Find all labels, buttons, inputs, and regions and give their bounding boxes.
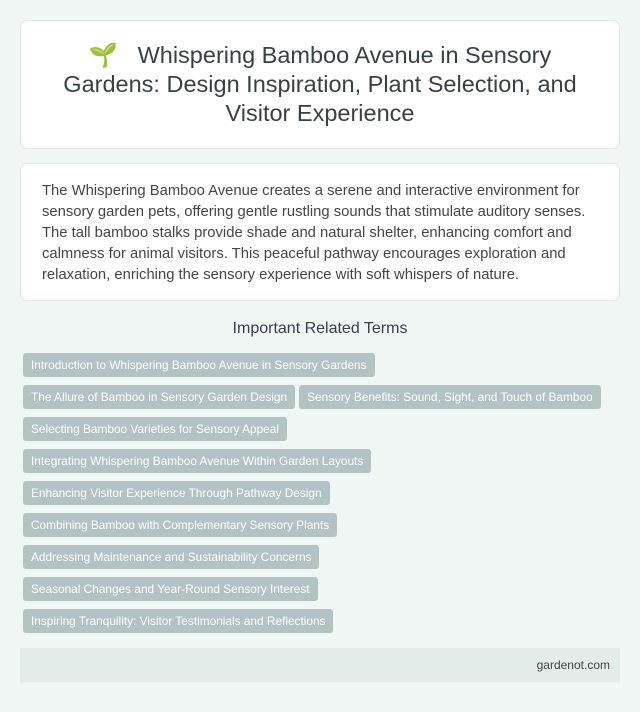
tags list: Combining Bamboo with Complementary Sensory Plants — [31, 518, 329, 532]
description card — [20, 163, 620, 301]
tags list — [23, 353, 601, 633]
tags list: Sensory Benefits: Sound, Sight, and Touch of Bamboo — [307, 390, 593, 404]
footer — [20, 648, 620, 682]
tags list: The Allure of Bamboo in Sensory Garden Design — [31, 390, 287, 404]
tags list: Addressing Maintenance and Sustainability Concerns — [31, 550, 311, 564]
description card: calmness for animal visitors. This peaceful pathway encourages exploration and — [42, 246, 566, 262]
footer: gardenot.com — [537, 658, 610, 672]
title card: 🌱 Whispering Bamboo Avenue in Sensory Gardens: Design Inspiration, Plant Selection, and Visitor Experience — [63, 42, 577, 126]
heading: related terms: Important Related Terms — [233, 320, 407, 337]
title card — [20, 20, 620, 149]
description card: The tall bamboo stalks provide shade and natural shelter, enhancing comfort and — [42, 225, 572, 241]
tags list: Enhancing Visitor Experience Through Pathway Design — [31, 486, 322, 500]
description card: The Whispering Bamboo Avenue creates a serene and interactive environment for — [42, 183, 580, 199]
description card: relaxation, enriching the sensory experience with soft whispers of nature. — [42, 267, 519, 283]
tags list: Introduction to Whispering Bamboo Avenue in Sensory Gardens — [31, 358, 367, 372]
tags list: Inspiring Tranquility: Visitor Testimonials and Reflections — [31, 614, 325, 628]
tags list: Integrating Whispering Bamboo Avenue Within Garden Layouts — [31, 454, 363, 468]
tags list: Seasonal Changes and Year-Round Sensory Interest — [31, 582, 310, 596]
description card: sensory garden pets, offering gentle rustling sounds that stimulate auditory senses. — [42, 204, 585, 220]
tags list: Selecting Bamboo Varieties for Sensory Appeal — [31, 422, 279, 436]
